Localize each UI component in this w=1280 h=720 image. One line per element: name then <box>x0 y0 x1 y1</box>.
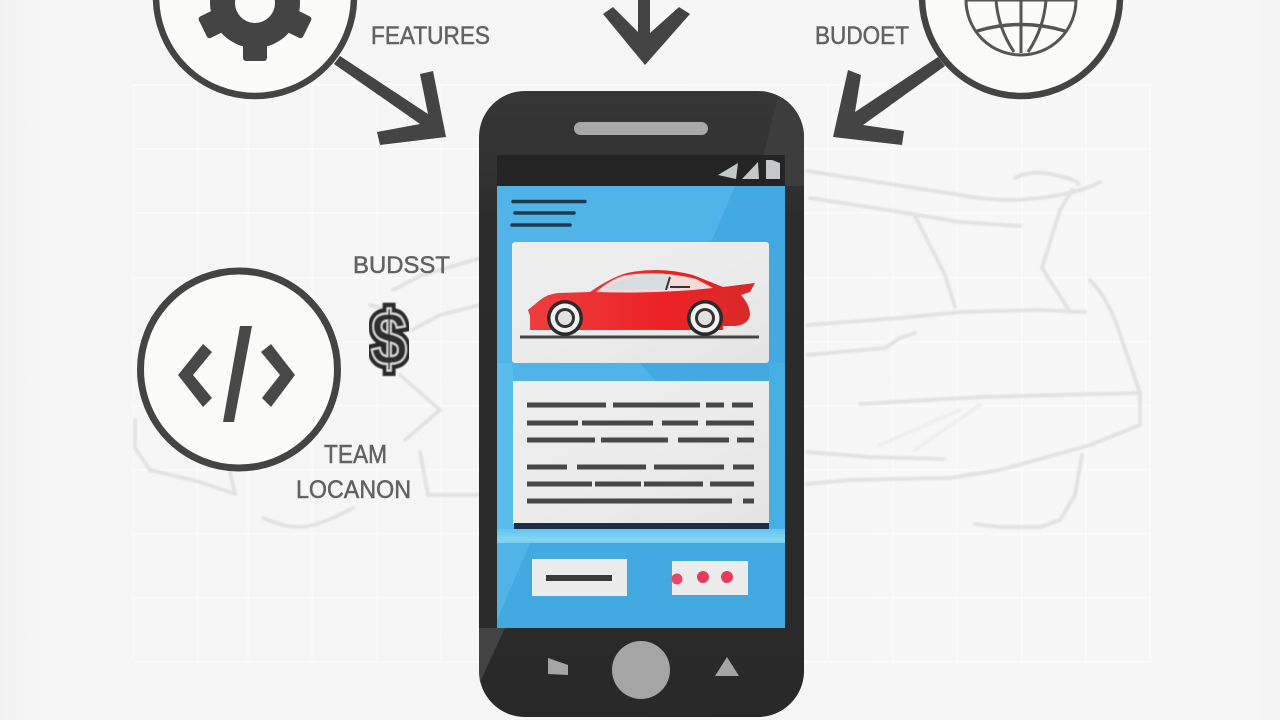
circle outline <box>156 0 354 96</box>
screen <box>497 186 785 628</box>
car illustration <box>520 270 759 337</box>
back nav icon <box>548 658 568 675</box>
phone body <box>479 91 804 717</box>
label: location: LOCANON <box>296 476 411 504</box>
status bar <box>497 155 785 186</box>
light strip under text card <box>497 529 785 543</box>
icon: globe <box>966 0 1076 55</box>
icon: code brackets <box>178 326 295 422</box>
right button <box>672 561 748 595</box>
text lines <box>527 402 754 504</box>
arrow: globe to phone <box>833 57 945 145</box>
icon: dollar sign: $ <box>371 296 407 381</box>
top right globe badge <box>922 0 1120 96</box>
home button <box>612 641 670 699</box>
text card <box>513 381 769 529</box>
label: team: TEAM <box>324 439 387 469</box>
arrow: gear to phone <box>334 56 446 145</box>
menu icon <box>512 202 585 225</box>
background car sketch <box>135 171 1140 527</box>
phone <box>479 91 804 717</box>
label: features: FEATURES <box>371 22 490 50</box>
label: budget top: BUDOET <box>815 22 909 50</box>
label: budget left: BUDSST <box>353 252 450 279</box>
icon: gear <box>198 0 312 61</box>
icon: dollar sign: $ <box>371 296 407 381</box>
left button <box>532 559 627 596</box>
circle outline <box>140 271 338 468</box>
menu nav icon <box>715 657 739 676</box>
top left gear badge <box>156 0 354 96</box>
speaker <box>574 122 708 135</box>
car image card <box>512 242 769 363</box>
arrow: top centre down <box>603 0 690 65</box>
code badge <box>140 271 338 468</box>
circle outline <box>922 0 1120 96</box>
